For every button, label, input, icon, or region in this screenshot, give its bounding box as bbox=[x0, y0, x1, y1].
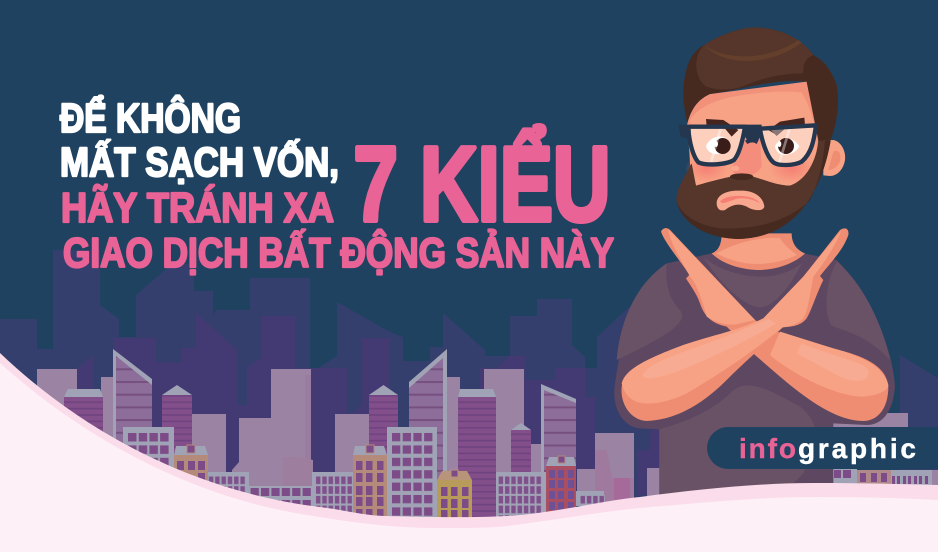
beard bbox=[676, 141, 831, 239]
badge label pink: info bbox=[739, 433, 796, 464]
tower 7 small bbox=[511, 423, 531, 480]
yellow building bbox=[437, 470, 472, 522]
back skyline silhouette bbox=[0, 250, 938, 500]
eyebrows bbox=[706, 118, 805, 137]
shirt bbox=[614, 253, 895, 507]
tower 6 tall bbox=[458, 389, 496, 522]
bottom wave outer bbox=[0, 353, 938, 552]
tower 1 with flat roof bbox=[64, 389, 103, 447]
mouth bbox=[717, 191, 764, 210]
tower 8 slanted bbox=[541, 384, 576, 480]
hair bbox=[683, 27, 838, 141]
title line 1: ĐỂ KHÔNG bbox=[60, 94, 241, 141]
lens reflections bbox=[711, 127, 790, 163]
title block bbox=[60, 94, 614, 276]
glasses lenses bbox=[690, 127, 814, 163]
red building bbox=[546, 456, 576, 514]
light background buildings bbox=[37, 369, 938, 503]
eyes bbox=[706, 137, 799, 155]
badge label white: graphic bbox=[798, 433, 916, 464]
grid building 3 bbox=[496, 472, 546, 518]
ear bbox=[823, 140, 845, 176]
tower 5 slanted bbox=[409, 349, 447, 480]
right-side arm bbox=[661, 228, 888, 421]
low grid buildings left bbox=[208, 472, 353, 520]
tower 3 pointed bbox=[162, 385, 192, 455]
tower 2 slanted bbox=[113, 349, 152, 450]
title line 3: HÃY TRÁNH XA bbox=[61, 184, 334, 231]
grid building 2 bbox=[387, 427, 437, 522]
tower 4 pointed bbox=[369, 385, 398, 455]
man torso and arms bbox=[614, 228, 895, 507]
left-side arm bbox=[621, 228, 848, 421]
mid skyline silhouette bbox=[77, 313, 660, 500]
brick building 2 bbox=[353, 445, 387, 520]
big headline: 7 KIỂU: 7 KIỂU bbox=[354, 126, 610, 244]
title line 2: MẤT SẠCH VỐN, bbox=[60, 139, 339, 185]
badge: infographic bbox=[707, 427, 938, 469]
bottom wave inner bbox=[0, 363, 938, 552]
man head bbox=[676, 27, 845, 239]
low grid building small bbox=[576, 491, 605, 506]
grid building 1 bbox=[123, 427, 174, 488]
face skin bbox=[685, 82, 818, 186]
right side city behind badge bbox=[833, 466, 932, 488]
neck bbox=[712, 233, 805, 270]
title line 4: GIAO DỊCH BẤT ĐỘNG SẢN NÀY bbox=[63, 228, 614, 276]
glasses frame bbox=[678, 125, 816, 165]
brick building 1 bbox=[174, 445, 208, 500]
